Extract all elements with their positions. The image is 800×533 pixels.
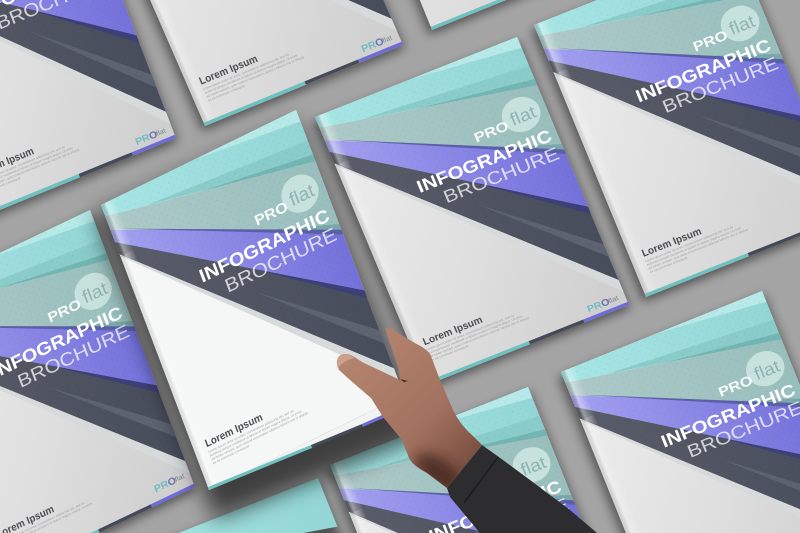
brochure: centre right: Lorem ipsum dolor sit amet, consectetuer adipiscing elit, sed do [426,313,515,352]
brochure: centre right: INFOGRAPHIC [414,126,555,197]
brochure: bottom centre [324,387,592,533]
brochure: top centre: PRO [360,37,386,55]
brochure: top right: flat [726,10,758,39]
brochure: centre right: Lorem Ipsum [421,314,484,348]
logo: PRO flat [254,185,316,226]
brochure: left: flat [80,277,111,307]
brochure: bottom right [557,291,800,533]
brochure: top right: Lorem ipsum dolor sit amet, consectetuer adipiscing elit, sed do [645,225,734,263]
brochure: top right: ad minim veniam, quis nostrud exercitation ullamco laboris nisi ut aliquip [648,227,749,270]
brochure: left: PRO [153,475,178,495]
logo: PRO flat: flat [287,180,318,211]
sleeve [447,445,597,533]
brochure: left: PRO [46,297,83,326]
brochure: centre right: ex ea commodo consequat [430,344,469,362]
brochure: top centre: ex ea commodo consequat [207,84,245,102]
brochure: left: flat [173,471,186,484]
brochure: top centre [138,0,409,135]
brochure: bottom right: INFOGRAPHIC [658,380,798,451]
brochure: top centre: Lorem Ipsum [198,53,260,87]
heading: brochure: BROCHURE [222,224,340,297]
brochure: centre right: euismod tempor incididunt ut labore et dolore magna aliqua. Ut enim [427,314,523,355]
brochure: centre right: PRO [586,297,612,315]
logo: PRO flat: PRO [253,199,290,230]
brochure: top right: Lorem Ipsum [640,226,703,259]
brochure: top right [530,0,800,302]
brochure: centre right [311,37,630,390]
brochure: top right: PRO [691,28,730,55]
text block: lorem ipsum: Lorem Ipsum [204,411,264,450]
brochure: bottom right: flat [751,356,783,384]
brochure: held main [101,110,410,490]
brochure: bottom right: BROCHURE [685,398,800,462]
hand [337,328,482,498]
text block: lorem ipsum: ad minim veniam, quis nostrud exercitation ullamco laboris nisi ut aliquip [211,411,309,461]
brochure: top left: flat [155,126,167,138]
brochure: centre right: BROCHURE [441,144,562,208]
text block: lorem ipsum: ex ea commodo consequat [212,444,250,465]
text block: lorem ipsum: Lorem ipsum dolor sit amet, consectetuer adipiscing elit, sed do [208,409,294,454]
brochure: top right: ex ea commodo consequat [649,256,688,274]
shadow of held brochure [95,122,425,520]
brochure: left [0,210,196,533]
brochure: top right: INFOGRAPHIC [633,35,774,106]
brochure: centre right: flat [507,101,540,130]
brochure: left: BROCHURE [15,321,132,393]
wrist shading [410,447,462,488]
heading: infographic: INFOGRAPHIC [197,206,333,287]
brochure: top centre: Lorem ipsum dolor sit amet, consectetuer adipiscing elit, sed do [202,52,290,91]
brochure: centre right: ad minim veniam, quis nostrud exercitation ullamco laboris nisi ut aliquip [429,316,530,359]
brochure: centre right: flat [607,294,620,305]
brochure: centre right: PRO [472,119,511,146]
icon: thumbnail [337,354,354,368]
brochure: top centre: flat [381,33,394,45]
brochure: top centre: ad minim veniam, quis nostrud exercitation ullamco laboris nisi ut aliquip [206,55,305,99]
brochure: top right: BROCHURE [660,54,781,118]
knuckle crease [400,379,408,382]
brochure: bottom sliver [174,478,347,533]
brochure: bottom right: PRO [716,373,755,400]
brochure: top right: euismod tempor incididunt ut labore et dolore magna aliqua. Ut enim [646,226,742,267]
brochure: top sliver [408,0,532,39]
brochure: top left [0,0,177,223]
text block: lorem ipsum: euismod tempor incididunt ut labore et dolore magna aliqua. Ut enim [209,409,302,458]
brochure: bottom centre: flat [518,452,549,480]
brochure: top left: PRO [134,129,159,148]
brochure: top centre: euismod tempor incididunt ut labore et dolore magna aliqua. Ut enim [204,53,298,95]
